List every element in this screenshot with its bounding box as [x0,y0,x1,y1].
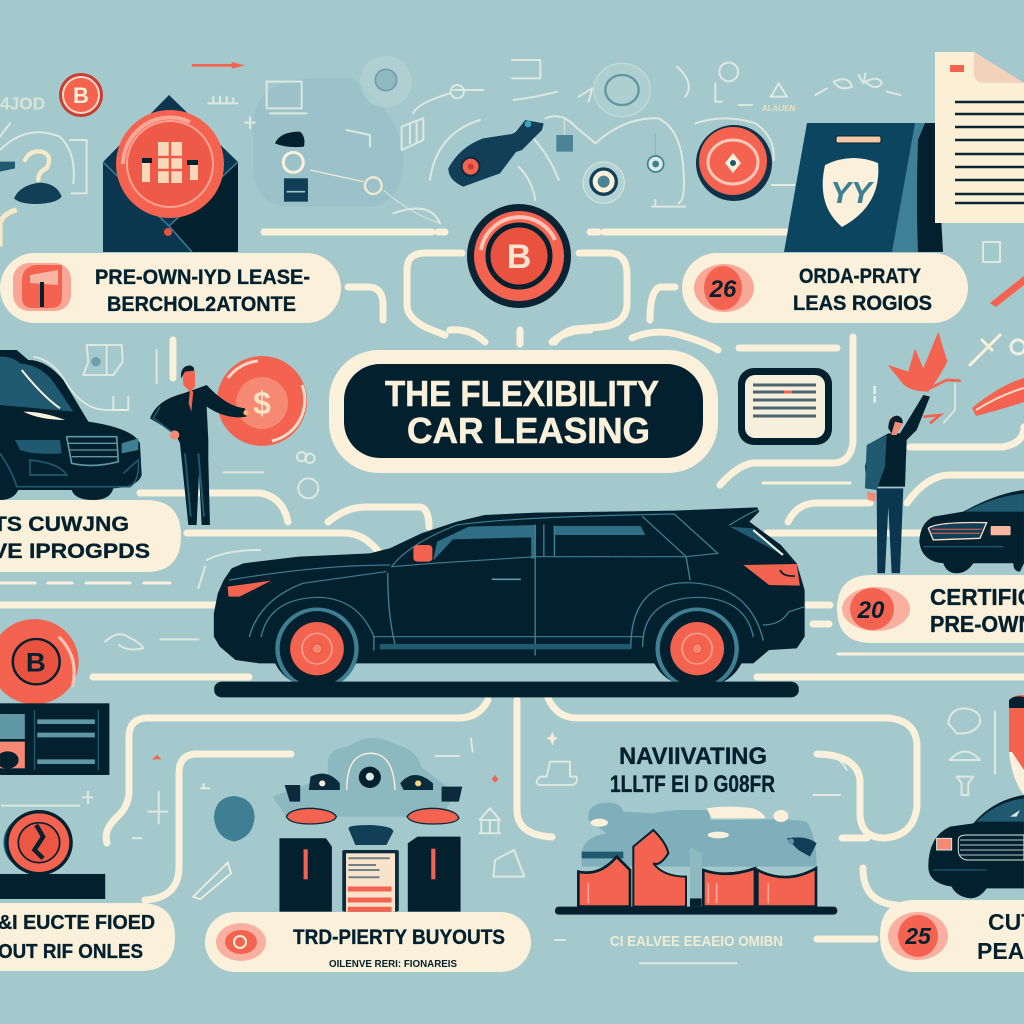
sketch: small dongle car [448,125,535,187]
icon: number badge 26: 26 [709,276,737,303]
label pill: right lower [880,900,1024,972]
icon: yield sign board: YY [830,175,875,210]
right car lower, front view [928,795,1024,898]
figure: woman raising leaf [865,332,961,573]
icon: number badge 20 [842,587,910,631]
icon: coral compass badge [696,125,795,201]
label pill: third-party lease: ORDA-PRATY [799,265,921,288]
title block: CAR LEASING [407,410,650,451]
hero car: black SUV side view [214,507,805,697]
icon: B coin [0,619,79,704]
icon: number badge 20: 20 [857,597,885,624]
icon: small B badge: B [73,83,89,108]
label pill: third-party buyouts: OILENVE RERI: FIONAREIS [329,958,457,970]
sketch: pen and leaf right edge [970,242,1024,416]
panel: lower left coin and monitor [0,619,198,899]
title block: THE FLEXIBILITY [385,373,659,414]
icon: dollar coin: $ [253,385,271,421]
panel: third-party buyouts illustration [193,738,524,912]
illustration: coral bars with landscape [555,803,837,915]
label pill: certified pre-owned [837,575,1024,643]
faint sketch icons: lower centre right [537,708,995,963]
faint sketch icons: left [83,345,318,588]
label pill: right lower: PEA [977,938,1024,964]
monitor panel [0,703,109,775]
icon: coral canister right edge [1009,695,1024,795]
connector paths [0,232,1024,939]
left car, front view [0,350,142,500]
icon: coral tile [13,263,71,311]
heading: navigating [610,743,775,798]
figure: man presenting [150,365,249,525]
icon: yield sign board [784,123,943,252]
heading: navigating: 1LLTF EI D G08FR [610,771,775,798]
title block [329,350,718,473]
label pill: pre-owned lease [0,253,341,323]
label pill: lower left: OUT RIF ONLES [0,941,143,963]
icon: number badge 25 [888,912,948,960]
icon: B coin: B [26,647,46,678]
faint sketch icons: top right: ALAUEN [762,104,795,113]
label pill: lower left: &I EUCTE FIOED [0,912,155,934]
label pill: pre-owned lease: BERCHOL2ATONTE [107,293,296,316]
icon: clock coin on shelf [0,810,105,899]
faint sketch icons: top: 4JOD [0,93,45,113]
label pill: third-party buyouts [205,912,531,972]
document sheet [935,52,1024,223]
faint sketch icons: top [0,56,483,247]
heading: navigating: NAVIIVATING [619,743,767,770]
label pill: third-party lease [682,253,968,323]
label pill: lower left [0,903,175,971]
caption: faint lower text: CI EALVEE EEAEIO OMIBN [610,933,783,950]
label pill: pre-owned lease: PRE-OWN-IYD LEASE- [95,266,310,289]
icon: centre B badge [467,204,571,308]
icon: number badge 25: 25 [904,923,932,949]
icon: small B badge [59,73,103,117]
front wheel [277,609,356,688]
icon: screen with table [738,368,832,445]
right car, front view [919,490,1024,573]
icon: number badge 26 [694,264,754,312]
icon: dollar coin [217,356,307,446]
icon: centre B badge: B [507,238,531,276]
rear wheel [658,609,737,688]
label pill: left middle [0,500,181,572]
icon: envelope with coral badge [103,95,238,252]
faint sketch icons: top right [512,60,900,207]
label pill: third-party buyouts: TRD-PIERTY BUYOUTS [293,926,505,949]
icon: coral seal [216,923,266,961]
label pill: third-party lease: LEAS ROGIOS [793,292,932,315]
